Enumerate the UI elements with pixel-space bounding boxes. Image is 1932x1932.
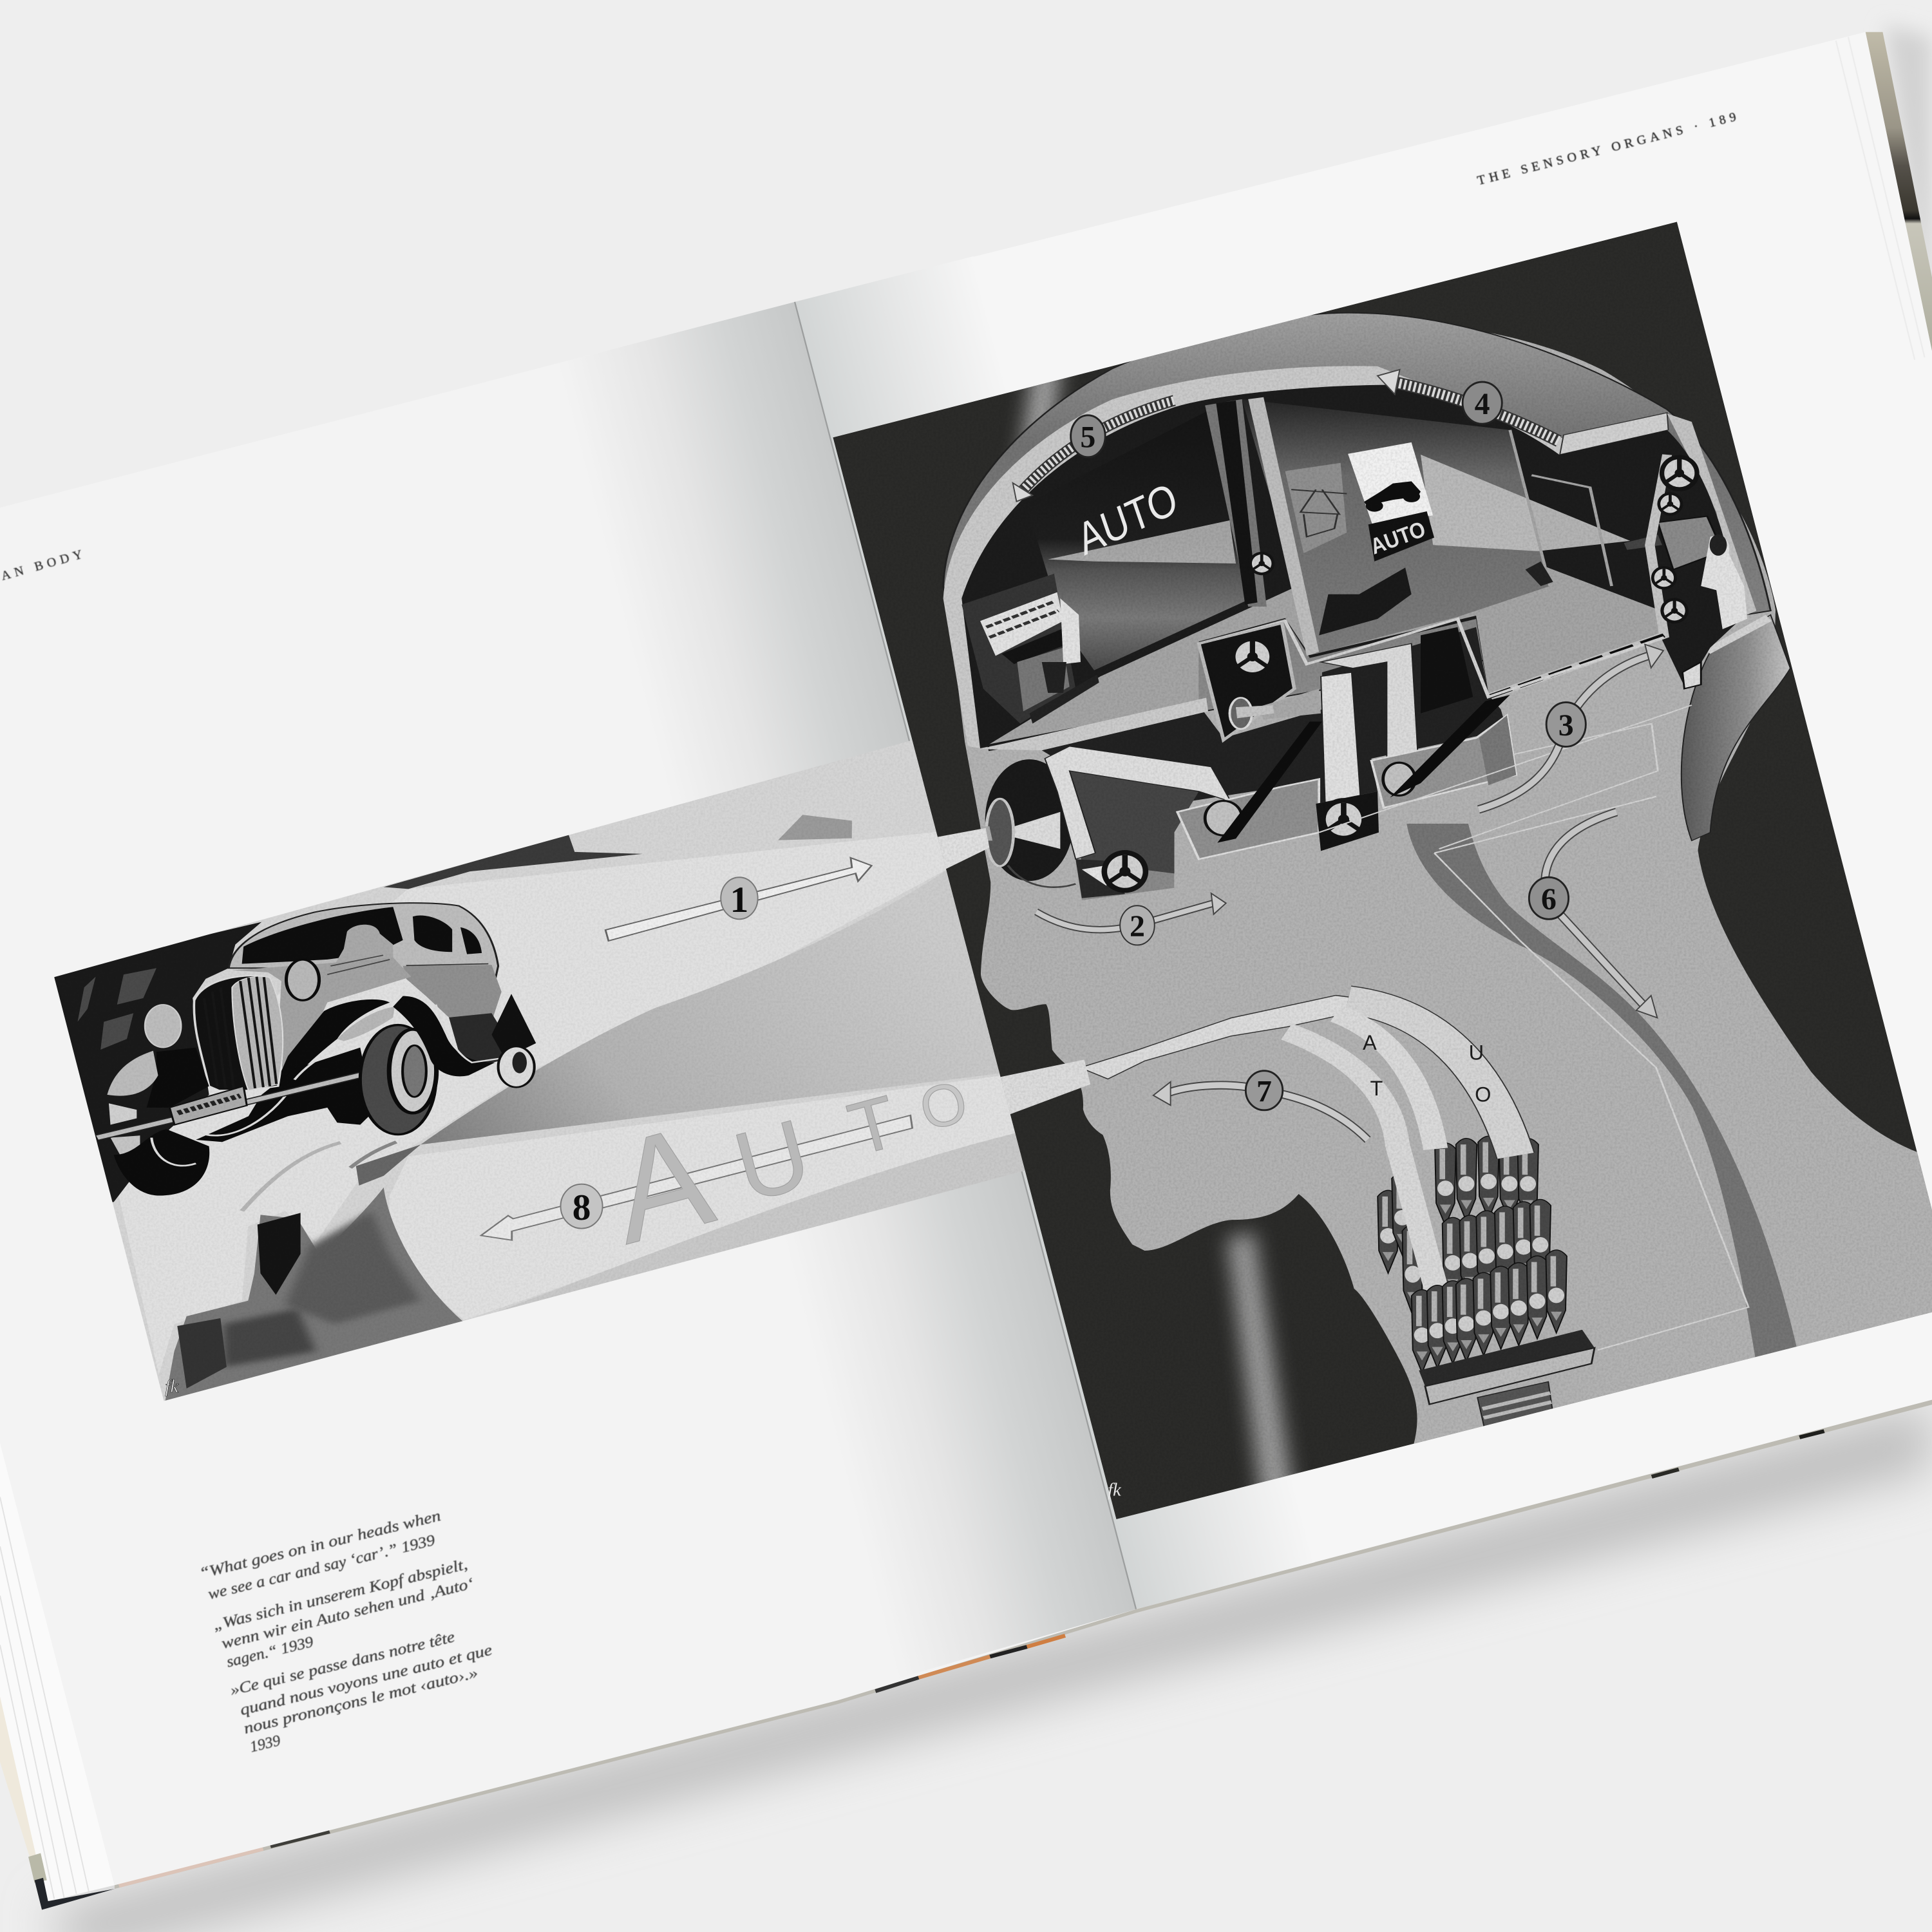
arrow 3 bbox=[1479, 645, 1663, 810]
eye sight beam bbox=[933, 828, 989, 873]
caption text block: wenn wir ein Auto sehen und ‚Auto‘ bbox=[220, 1575, 475, 1653]
belt letters: A bbox=[1363, 1031, 1377, 1054]
book cover corner bbox=[35, 1878, 115, 1910]
right page bbox=[795, 32, 1932, 1609]
eyeball bbox=[980, 759, 1075, 887]
caption text block: nous prononçons le mot ‹auto›.» bbox=[242, 1665, 480, 1738]
AUTO spoken letters: U bbox=[724, 1098, 821, 1223]
speech beam inside mouth bbox=[1001, 1059, 1090, 1115]
left page bbox=[0, 302, 1136, 1885]
number 8 badge bbox=[561, 1184, 603, 1229]
dark panel ground bbox=[833, 222, 1932, 1519]
far tree line bbox=[384, 835, 643, 889]
book page edges: left stack bbox=[0, 1443, 115, 1901]
spine crease bbox=[795, 302, 1136, 1609]
book page edges: bottom strip bbox=[115, 1399, 1932, 1889]
left panel grain bbox=[54, 739, 1028, 1405]
arrow 2 bbox=[1036, 893, 1226, 930]
belt letters bbox=[1363, 1031, 1491, 1106]
belt letters: T bbox=[1370, 1077, 1383, 1100]
caption text block: quand nous voyons une auto et que bbox=[238, 1642, 494, 1719]
caption text block: we see a car and say ‘car’.” 1939 bbox=[207, 1532, 437, 1603]
back ribbon bbox=[1681, 615, 1790, 840]
piano operator bbox=[961, 574, 1099, 724]
running head: right page: THE SENSORY ORGANS · 189 bbox=[1476, 110, 1738, 188]
neck highlight bbox=[1227, 1232, 1294, 1503]
number badges 2 to 7: 2 bbox=[1130, 909, 1145, 943]
caption text block: “What goes on in our heads when bbox=[198, 1508, 442, 1582]
light strip bbox=[943, 366, 1562, 748]
caption text block: »Ce qui se passe dans notre tête bbox=[229, 1629, 457, 1699]
neck tube bbox=[1406, 797, 1798, 1361]
projectionist bbox=[1624, 516, 1747, 629]
belt letters: U bbox=[1469, 1041, 1484, 1064]
eye dark box bbox=[1070, 771, 1199, 873]
arrow 4 bbox=[1378, 370, 1558, 441]
arrow 5 bbox=[1013, 401, 1174, 502]
sign bbox=[1348, 442, 1433, 526]
left illustration: landscape and beams bbox=[54, 741, 1025, 1401]
number 1 badge bbox=[721, 877, 758, 920]
skull shell bbox=[943, 313, 1770, 750]
second room wall bbox=[1242, 399, 1550, 654]
arrow 6 bbox=[1545, 812, 1657, 1018]
book drop shadow bbox=[50, 1405, 1932, 1932]
left room wall bbox=[1027, 408, 1251, 670]
projected word AUTO: AUTO bbox=[1071, 473, 1184, 565]
head silhouette bbox=[946, 320, 1932, 1479]
train shadow bbox=[1319, 567, 1412, 636]
belt letters: O bbox=[1475, 1083, 1491, 1106]
AUTO spoken letters bbox=[626, 1084, 965, 1245]
back pipes bbox=[1378, 1190, 1399, 1273]
film strips bbox=[1217, 721, 1322, 843]
box right top bbox=[1421, 627, 1473, 714]
cavity bbox=[961, 385, 1741, 748]
film path bbox=[1488, 455, 1667, 697]
number badges 2 to 7: 5 bbox=[1080, 421, 1095, 455]
number badges 2 to 7: 6 bbox=[1541, 882, 1557, 916]
lower gray boxes bbox=[1177, 779, 1319, 859]
right frame bbox=[1510, 430, 1612, 586]
caption text block: sagen.“ 1939 bbox=[225, 1634, 315, 1671]
arrow 7 bbox=[1153, 1082, 1368, 1140]
right edge shadow bbox=[1885, 24, 1932, 357]
skull interior bbox=[943, 313, 1790, 900]
sign word AUTO: AUTO bbox=[1367, 517, 1429, 559]
rear wheels bbox=[1249, 552, 1274, 575]
number 1 badge: 1 bbox=[730, 880, 748, 920]
organ base bbox=[1419, 1330, 1595, 1387]
number badges 2 to 7: 3 bbox=[1558, 708, 1574, 743]
AUTO spoken letters: T bbox=[840, 1080, 905, 1171]
signature left: fk bbox=[165, 1376, 179, 1397]
car with trees bbox=[38, 903, 536, 1202]
AUTO spoken letters: O bbox=[913, 1068, 974, 1144]
running head: left page: AN BODY bbox=[0, 547, 84, 583]
lower chamber bbox=[1042, 627, 1507, 873]
caption text block bbox=[198, 1508, 494, 1756]
floor bbox=[989, 562, 1662, 744]
caption text block: „Was sich in unserem Kopf abspielt, bbox=[211, 1556, 469, 1634]
AUTO spoken letters: A bbox=[601, 1094, 724, 1275]
signature right: fk bbox=[1108, 1480, 1122, 1501]
mechanism box upper bbox=[1199, 623, 1294, 740]
caption text block: 1939 bbox=[249, 1732, 282, 1756]
projector beam bbox=[1421, 455, 1630, 551]
speech belts bbox=[1348, 1000, 1516, 1156]
book page edges: right fore-edge bbox=[1866, 32, 1932, 351]
left pillar bbox=[1205, 399, 1267, 607]
number 8 badge: 8 bbox=[573, 1188, 591, 1228]
grain overlay bbox=[833, 222, 1932, 1519]
panel top highlight bbox=[1010, 360, 1062, 530]
organ: belts and pipes bbox=[1080, 996, 1595, 1430]
number badges 2 to 7: 7 bbox=[1256, 1074, 1272, 1108]
arrows 1 and 8 group bbox=[481, 858, 913, 1240]
wire rectangle bbox=[1319, 705, 1692, 849]
right illustration: head cross-section bbox=[833, 222, 1932, 1519]
number badges 2 to 7 bbox=[1071, 382, 1586, 1110]
number badges 2 to 7: 4 bbox=[1475, 387, 1490, 421]
white belts bbox=[1045, 746, 1231, 859]
